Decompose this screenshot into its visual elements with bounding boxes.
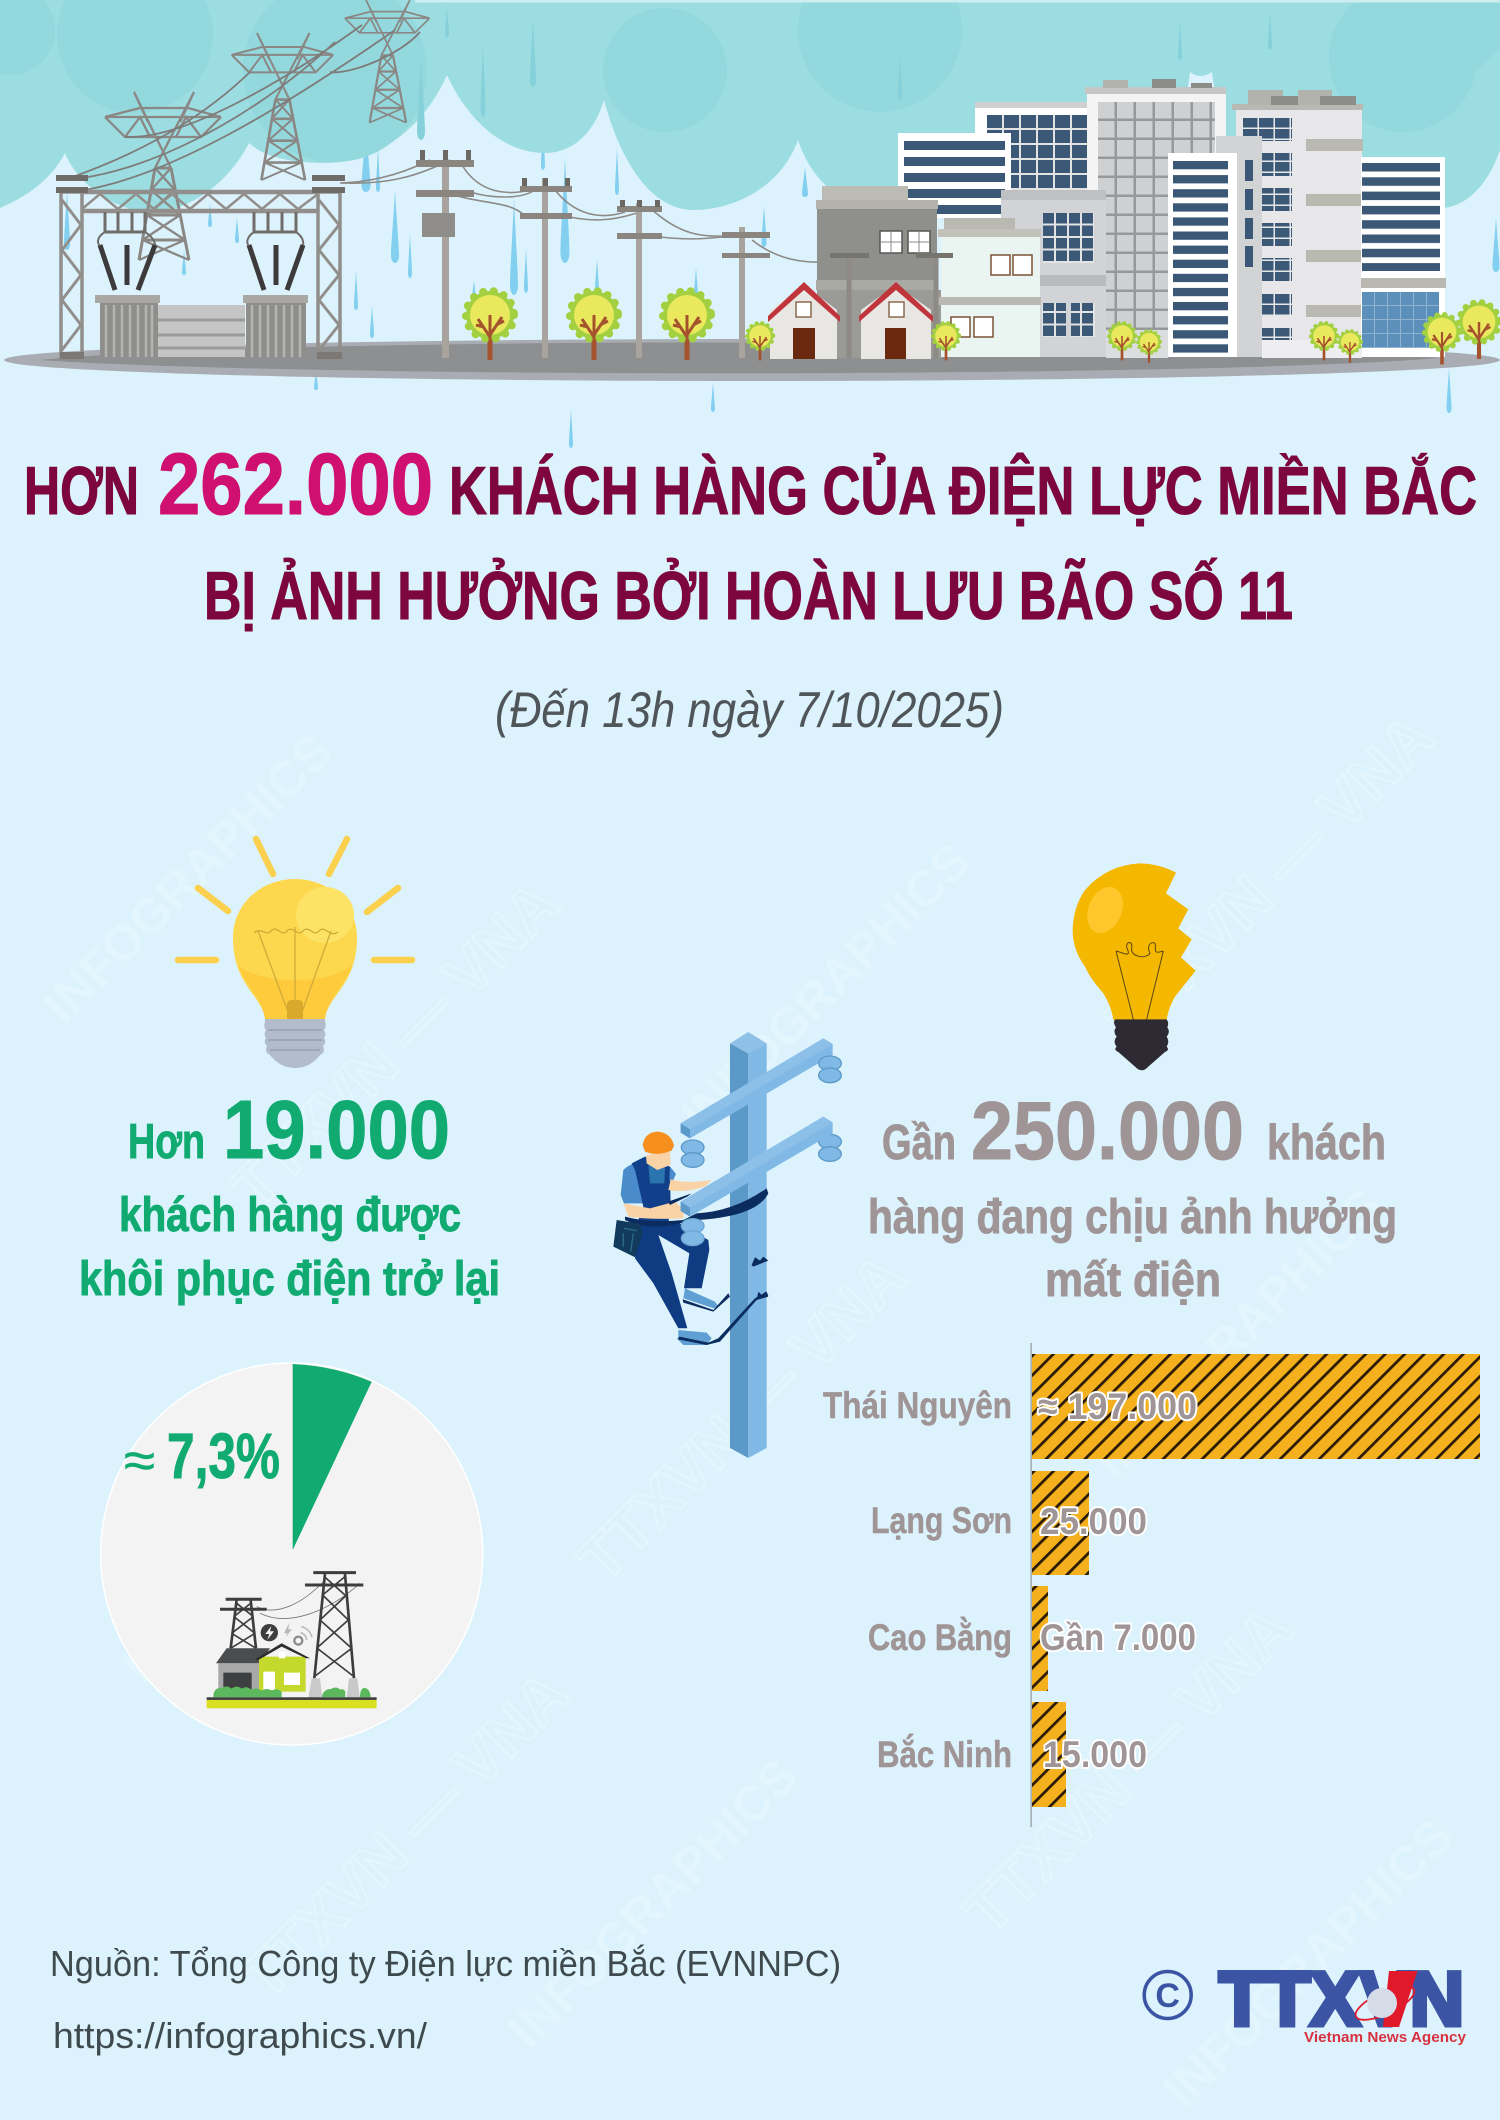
pie chart: restored share — [101, 1363, 483, 1745]
logo: copyright and TTXVN: Vietnam News Agency — [1304, 2030, 1466, 2046]
pie label — [124, 1420, 280, 1492]
province labels — [823, 1385, 1012, 1775]
province labels: Lạng Sơn — [871, 1500, 1012, 1541]
logo: copyright and TTXVN: TTXVN — [1219, 1957, 1464, 2042]
province labels: Thái Nguyên — [823, 1385, 1012, 1426]
callout: customers without power: 250.000 — [971, 1084, 1244, 1177]
callout: restored customers: khách hàng được — [119, 1189, 461, 1242]
icon: broken bulb — [1073, 863, 1196, 1070]
pole — [730, 1032, 767, 1458]
callout: restored customers: khôi phục điện trở lại — [79, 1253, 500, 1306]
value labels — [1038, 1386, 1197, 1775]
worker — [613, 1132, 768, 1345]
watermarks: INFOGRAPHICS — [111, 1383, 421, 1693]
illustration: rainy city and power grid — [0, 0, 1500, 448]
watermarks: INFOGRAPHICS — [1153, 1808, 1463, 2118]
trees — [466, 291, 1499, 364]
icon: line worker climbing a pole — [613, 1032, 841, 1458]
value labels: 25.000 — [1040, 1501, 1147, 1542]
watermarks: INFOGRAPHICS — [671, 833, 981, 1143]
icon: glowing bulb — [178, 839, 412, 1068]
callout: customers without power: khách — [1267, 1116, 1386, 1170]
front crossarm and insulator — [681, 1117, 833, 1246]
rain drops below the clouds — [64, 123, 1500, 448]
bar chart: affected customers by province — [823, 1343, 1480, 1827]
callout: customers without power: mất điện — [1045, 1254, 1221, 1307]
icon: transmission towers and wires — [70, 0, 430, 260]
province labels: Cao Bằng — [868, 1616, 1012, 1658]
watermarks: INFOGRAPHICS — [33, 723, 343, 1033]
source text: Nguồn: Tổng Công ty Điện lực miền Bắc (EVNNPC) — [50, 1943, 841, 1984]
value labels: 15.000 — [1043, 1734, 1147, 1775]
houses and street poles — [768, 253, 953, 359]
storm clouds — [0, 0, 1500, 212]
callout: restored customers — [79, 1083, 500, 1306]
logo: copyright and TTXVN: C — [1155, 1977, 1180, 2015]
title — [24, 436, 1477, 634]
watermarks — [33, 702, 1463, 2118]
value labels: Gần 7.000 — [1040, 1617, 1196, 1658]
watermarks: TTXVN — VNA — [566, 1242, 919, 1595]
watermarks: INFOGRAPHICS — [1083, 1178, 1393, 1488]
watermarks: INFOGRAPHICS — [498, 1748, 808, 2058]
watermarks: TTXVN — VNA — [219, 869, 572, 1222]
callout: restored customers: 19.000 — [223, 1083, 450, 1176]
source text: https://infographics.vn/ — [53, 2015, 427, 2056]
pie label: ≈ — [124, 1432, 155, 1490]
watermarks: TTXVN — VNA — [229, 1659, 582, 2012]
bars — [1032, 1354, 1480, 1807]
callout: customers without power — [868, 1084, 1397, 1307]
watermarks: TTXVN — VNA — [952, 1594, 1305, 1947]
callout: restored customers: Hơn — [128, 1115, 205, 1169]
callout: customers without power: hàng đang chịu ảnh hưởng — [868, 1191, 1397, 1244]
value labels: ≈ 197.000 — [1038, 1386, 1197, 1427]
title: HƠN — [24, 453, 139, 529]
title: 262.000 — [158, 436, 433, 533]
province labels: Bắc Ninh — [877, 1733, 1012, 1775]
ground — [4, 339, 1500, 381]
icon: substation — [56, 178, 345, 359]
pie label: 7,3% — [167, 1420, 280, 1492]
buildings — [816, 79, 1446, 358]
callout: customers without power: Gần — [882, 1116, 956, 1170]
icon: towers and house — [207, 1573, 377, 1708]
crossarms and insulators — [681, 1038, 841, 1167]
watermarks: TTXVN — VNA — [1094, 702, 1447, 1055]
icon: utility poles and lines — [340, 150, 930, 358]
subtitle: date: (Đến 13h ngày 7/10/2025) — [495, 682, 1004, 738]
rain drops over the clouds — [417, 7, 1272, 140]
source text — [50, 1943, 841, 2056]
